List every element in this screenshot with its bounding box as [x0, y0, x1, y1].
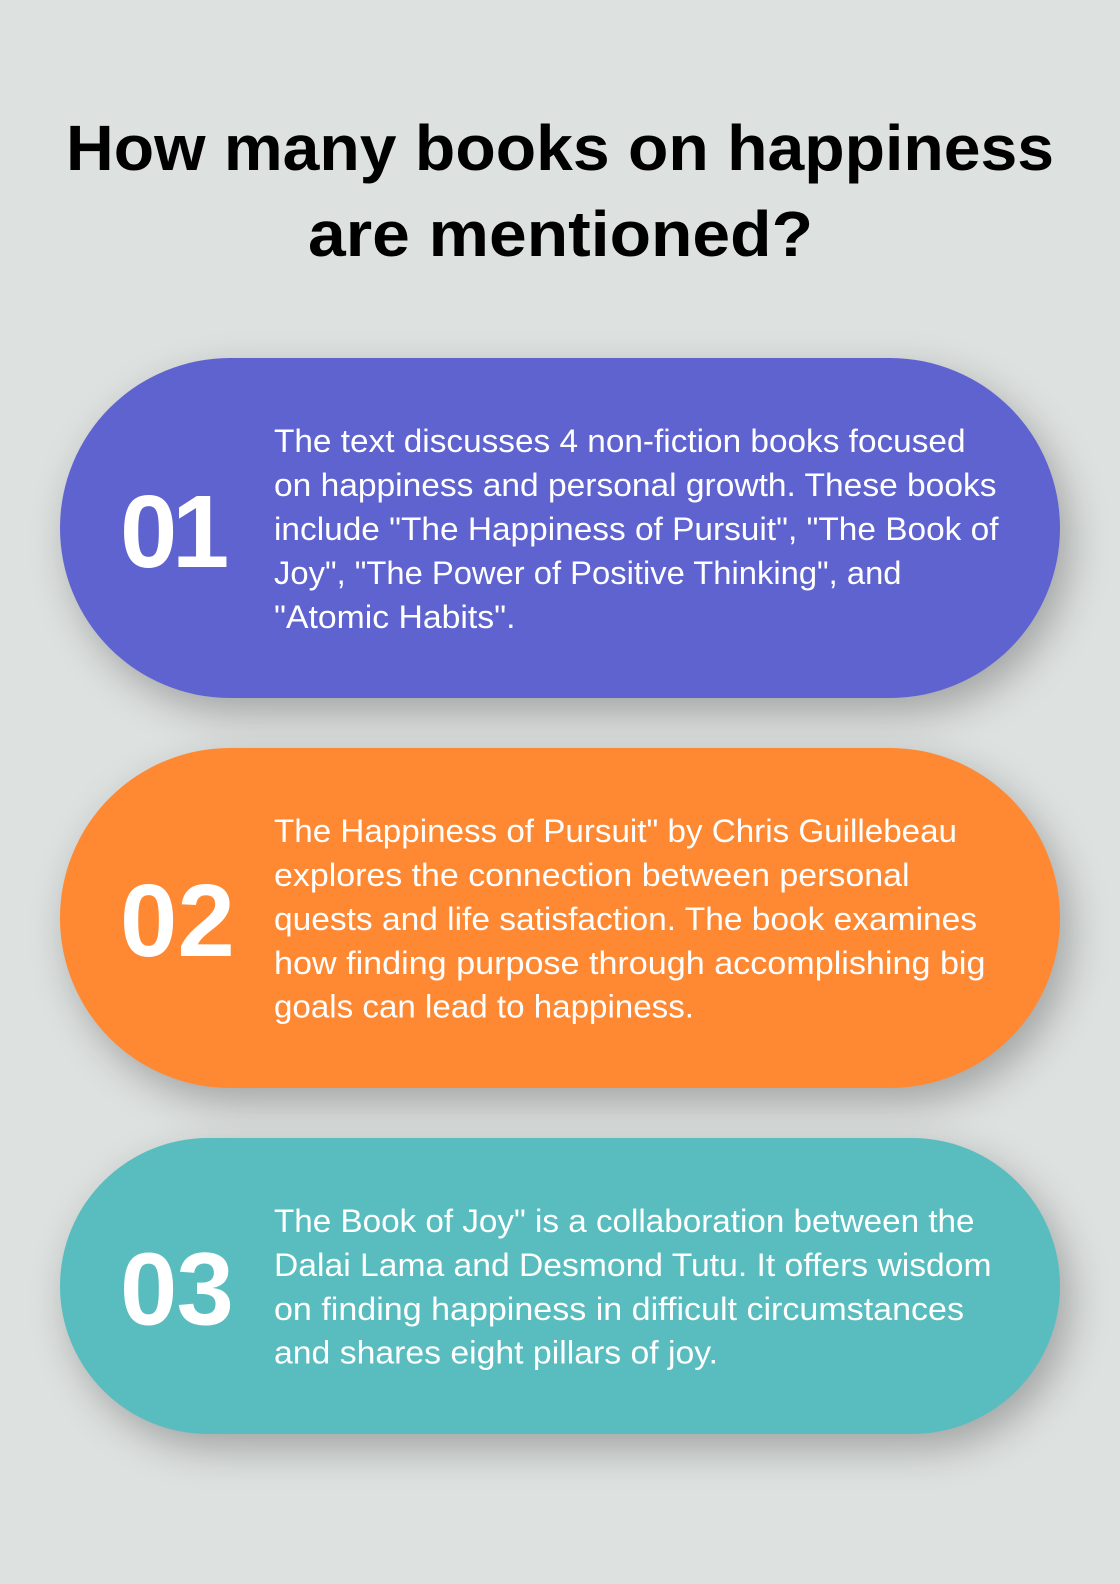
- text block: step 01 description: The text discusses 4 non-fiction books focused: [274, 423, 966, 459]
- text block: step 02 description: how finding purpose through accomplishing big: [274, 945, 986, 981]
- number: 01: 01: [120, 474, 229, 589]
- text block: step 02 description: quests and life satisfaction. The book examines: [274, 901, 977, 937]
- title: [66, 112, 1054, 270]
- panel: step 01: [60, 358, 1060, 698]
- title: How many books on happiness: [66, 112, 1054, 184]
- text block: step 02 description: The Happiness of Pursuit" by Chris Guillebeau: [274, 813, 957, 849]
- text block: step 03 description: and shares eight pillars of joy.: [274, 1334, 718, 1370]
- text block: step 01 description: on happiness and personal growth. These books: [274, 467, 996, 503]
- number: 02: 02: [120, 863, 235, 978]
- panel: step 03: [60, 1138, 1060, 1434]
- text block: step 03 description: on finding happiness in difficult circumstances: [274, 1291, 964, 1327]
- text block: step 03 description: The Book of Joy" is a collaboration between the: [274, 1203, 974, 1239]
- text block: step 02 description: goals can lead to happiness.: [274, 988, 694, 1024]
- text block: step 01 description: [274, 423, 999, 635]
- text block: step 03 description: Dalai Lama and Desmond Tutu. It offers wisdom: [274, 1247, 992, 1283]
- text block: step 02 description: [274, 813, 986, 1024]
- panel: step 02: [60, 748, 1060, 1088]
- text block: step 01 description: include "The Happiness of Pursuit", "The Book of: [274, 511, 999, 547]
- text block: step 02 description: explores the connection between personal: [274, 857, 910, 893]
- title: are mentioned?: [308, 198, 813, 270]
- number: 03: 03: [120, 1232, 234, 1346]
- text block: step 01 description: "Atomic Habits".: [274, 599, 516, 635]
- text block: step 03 description: [274, 1203, 992, 1370]
- text block: step 01 description: Joy", "The Power of Positive Thinking", and: [274, 555, 902, 591]
